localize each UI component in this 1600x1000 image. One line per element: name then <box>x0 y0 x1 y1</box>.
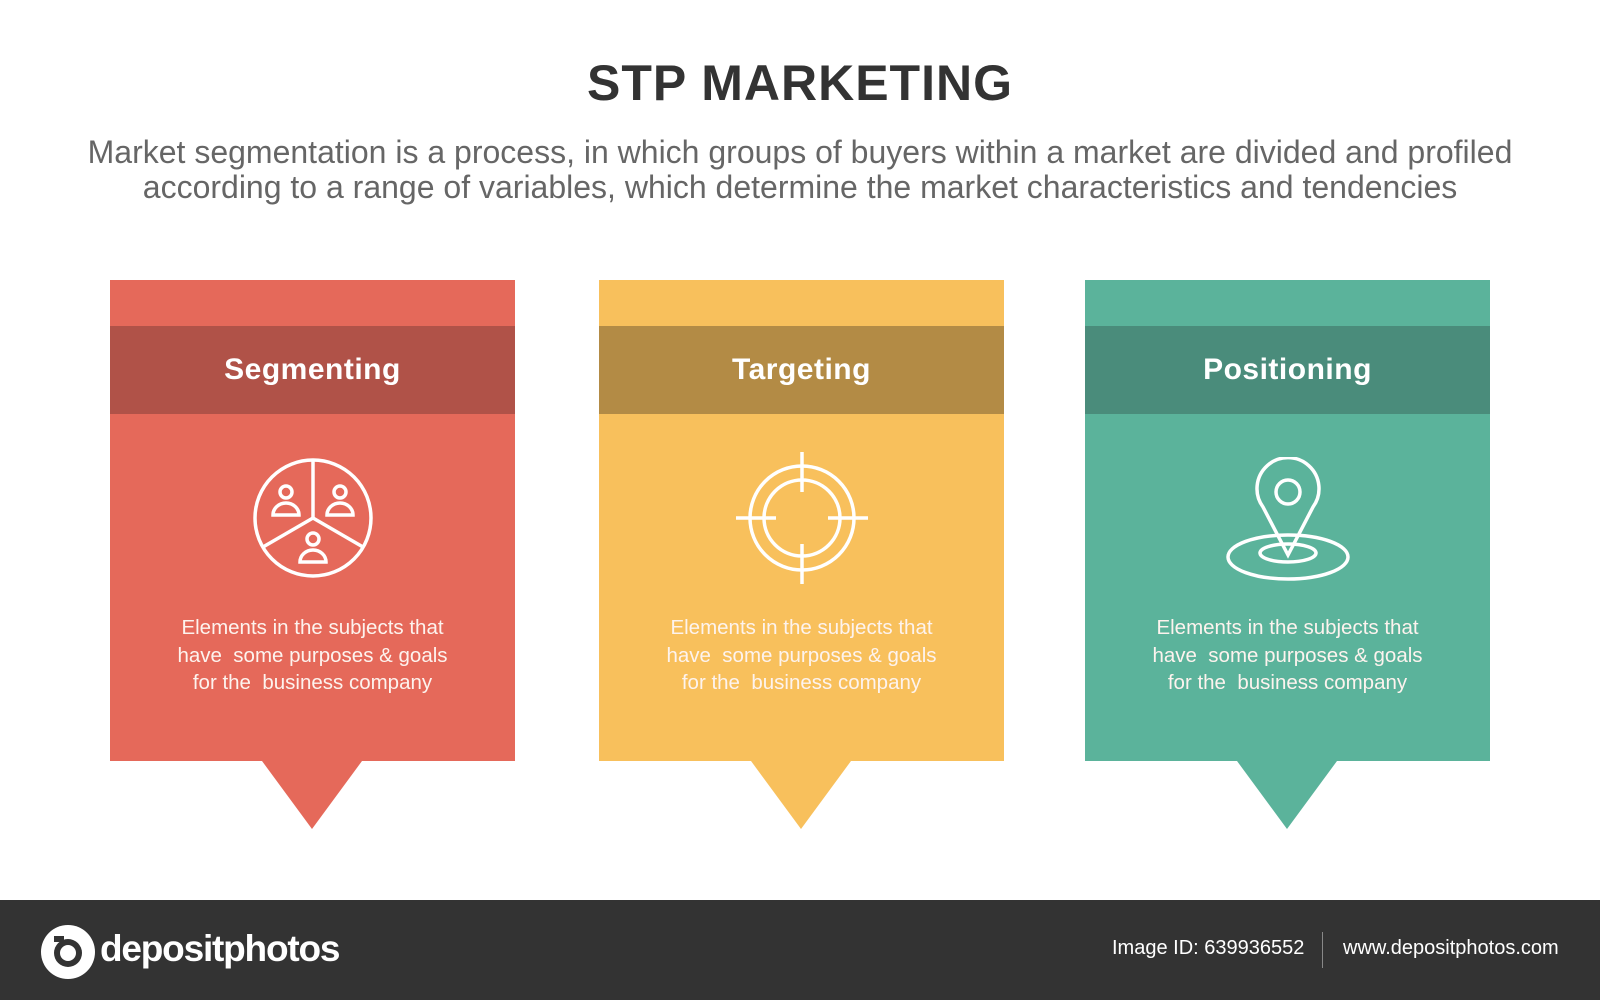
website: www.depositphotos.com <box>1343 937 1559 959</box>
text: segmenting: have some purposes & goals <box>177 644 448 666</box>
footer bar <box>0 900 1600 1000</box>
subtitle: Market segmentation is a process, in which groups of buyers within a market are divided and profiled <box>88 134 1512 170</box>
panel: targeting <box>599 280 1004 761</box>
text: targeting: have some purposes & goals <box>666 644 937 666</box>
text: targeting: for the business company <box>682 671 921 694</box>
panel: segmenting <box>110 280 515 761</box>
header: targeting <box>599 326 1004 414</box>
pointer <box>1237 761 1337 829</box>
text: positioning <box>1152 616 1423 694</box>
header: segmenting: Segmenting <box>224 353 401 386</box>
text: targeting: Elements in the subjects that <box>670 616 933 639</box>
footer logo <box>41 925 339 979</box>
text: positioning: have some purposes & goals <box>1152 644 1423 666</box>
text: positioning: Elements in the subjects that <box>1156 616 1419 639</box>
text: segmenting <box>177 616 448 694</box>
text: segmenting: Elements in the subjects that <box>181 616 444 639</box>
pointer <box>262 761 362 829</box>
icon: segments <box>253 458 373 578</box>
logo text: depositphotos <box>100 928 339 969</box>
text: positioning: for the business company <box>1168 671 1407 694</box>
title: STP MARKETING <box>587 55 1013 111</box>
header: positioning: Positioning <box>1203 353 1372 386</box>
text: segmenting: for the business company <box>193 671 432 694</box>
pointer <box>751 761 851 829</box>
panel: positioning <box>1085 280 1490 761</box>
header: segmenting <box>110 326 515 414</box>
header: positioning <box>1085 326 1490 414</box>
subtitle <box>88 134 1512 205</box>
logo icon <box>41 925 95 979</box>
icon: target <box>736 452 868 584</box>
image id: Image ID: 639936552 <box>1112 937 1304 959</box>
text: targeting <box>666 616 937 694</box>
header: targeting: Targeting <box>732 353 871 386</box>
icon: location pin <box>1226 457 1350 581</box>
subtitle: according to a range of variables, which determine the market characteristics and tendencies <box>143 169 1457 205</box>
